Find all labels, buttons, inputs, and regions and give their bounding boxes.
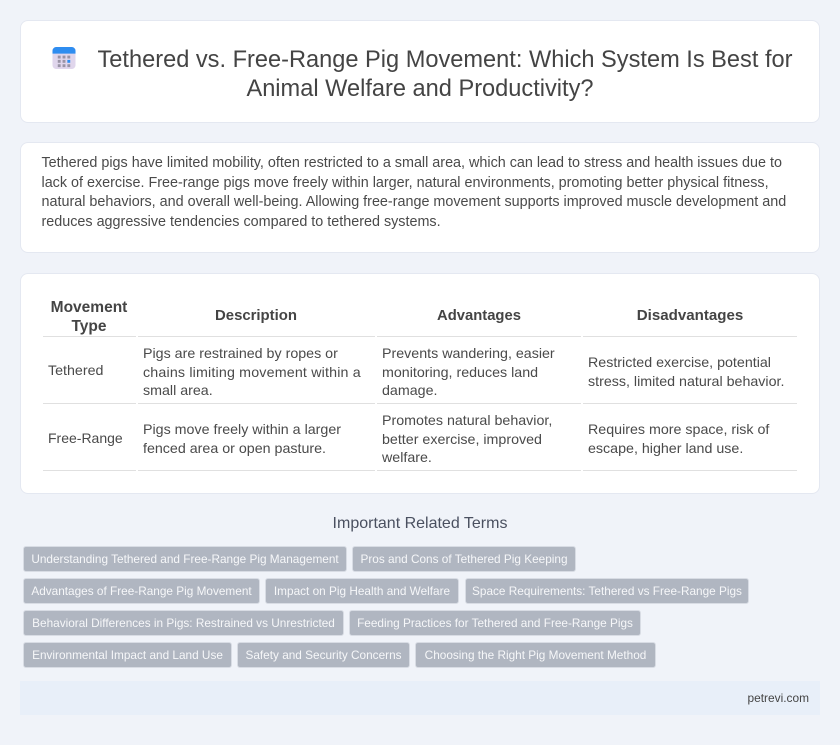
comparison table card: Pigs are restrained by ropes or — [143, 346, 338, 362]
intro paragraph: lack of exercise. Free-range pigs move freely within larger, natural environments, promoting better physical fitness, — [42, 174, 769, 190]
table header — [51, 299, 128, 335]
comparison table card: Prevents wandering, easier — [382, 346, 555, 362]
comparison table card: Description — [215, 308, 297, 324]
comparison table card: Disadvantages — [637, 307, 743, 324]
comparison table card: better exercise, improved — [382, 432, 542, 448]
table header: Movement — [51, 299, 127, 316]
comparison table card: Advantages — [437, 308, 521, 324]
comparison table card: chains limiting movement within a — [143, 364, 361, 380]
row: free-range: Free-Range — [48, 430, 123, 446]
intro paragraph: natural behaviors, and overall well-being. Allowing free-range movement supports improved muscle development and — [42, 194, 786, 210]
intro paragraph: Tethered pigs have limited mobility, often restricted to a small area, which can lead to stress and health issues due to — [42, 155, 782, 171]
title card — [20, 20, 820, 123]
intro paragraph: reduces aggressive tendencies compared to tethered systems. — [42, 214, 441, 230]
icon: calendar — [52, 47, 76, 69]
comparison table card: welfare. — [382, 450, 432, 466]
related terms tags: Behavioral Differences in Pigs: Restrained vs Unrestricted — [32, 616, 335, 630]
title — [98, 47, 792, 102]
title: Animal Welfare and Productivity? — [246, 76, 594, 102]
related terms tags: Understanding Tethered and Free-Range Pig Management — [31, 552, 339, 566]
title: Tethered vs. Free-Range Pig Movement: Which System Is Best for — [98, 47, 792, 73]
comparison table card: escape, higher land use. — [588, 440, 743, 456]
comparison table card: Requires more space, risk of — [588, 422, 769, 438]
related terms tags: Choosing the Right Pig Movement Method — [425, 648, 646, 662]
comparison table card: damage. — [382, 383, 437, 399]
comparison table card: fenced area or open pasture. — [143, 440, 326, 456]
comparison table card: Restricted exercise, potential — [588, 355, 771, 371]
related terms tags: Space Requirements: Tethered vs Free-Range Pigs — [472, 584, 742, 598]
related terms tags: Safety and Security Concerns — [245, 648, 402, 662]
footer bar — [20, 681, 820, 715]
comparison table card: Promotes natural behavior, — [382, 413, 552, 429]
comparison table card: stress, limited natural behavior. — [588, 374, 784, 390]
related terms tags: Environmental Impact and Land Use — [32, 648, 223, 662]
related terms tags — [23, 546, 749, 668]
row: tethered: Tethered — [48, 363, 103, 379]
related terms heading: Important Related Terms — [333, 515, 507, 532]
related terms tags: Advantages of Free-Range Pig Movement — [31, 584, 252, 598]
intro text card — [20, 142, 820, 253]
intro paragraph — [42, 155, 786, 230]
comparison table card: Pigs move freely within a larger — [143, 422, 341, 438]
related terms tags: Feeding Practices for Tethered and Free-Range Pigs — [357, 616, 633, 630]
footer site name: petrevi.com — [748, 691, 809, 705]
comparison table card — [20, 273, 820, 494]
comparison table card: small area. — [143, 383, 213, 399]
related terms tags: Impact on Pig Health and Welfare — [274, 584, 450, 598]
comparison table card: monitoring, reduces land — [382, 364, 538, 380]
table header: Type — [71, 318, 107, 335]
related terms tags: Pros and Cons of Tethered Pig Keeping — [360, 552, 568, 566]
